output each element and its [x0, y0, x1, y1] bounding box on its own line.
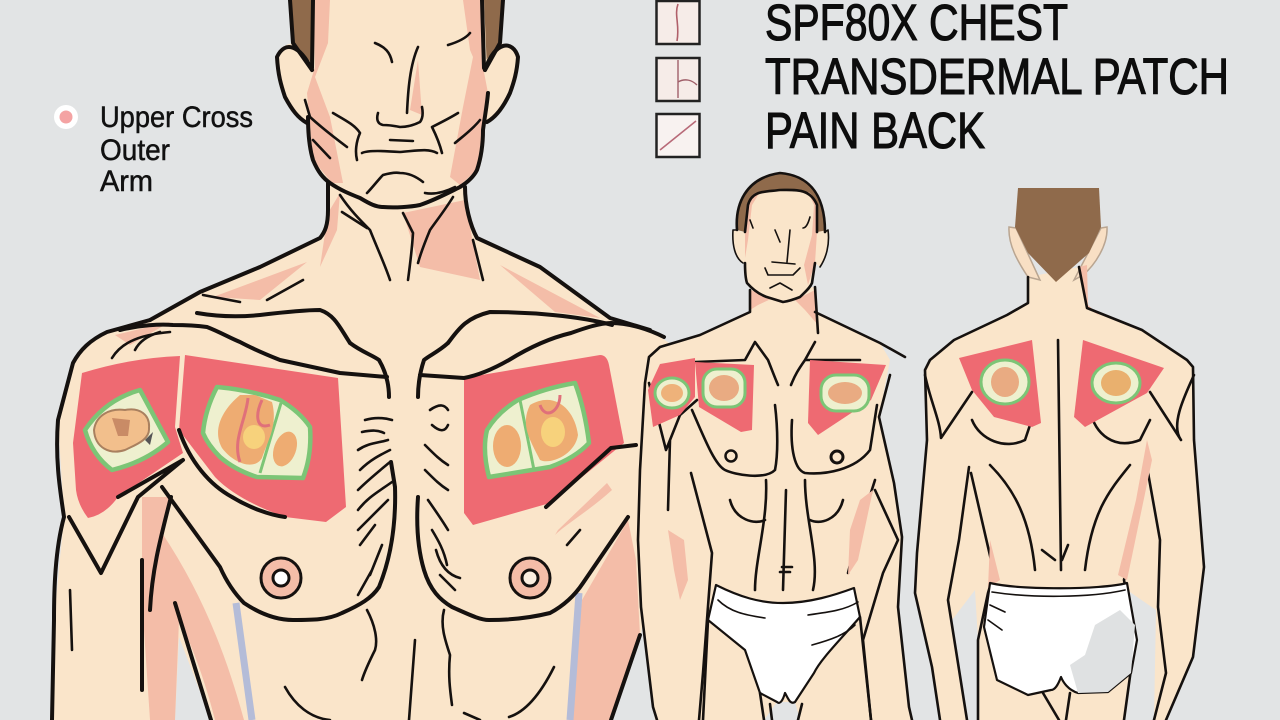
heading: legend labels: [765, 0, 1229, 159]
patch window with tissue: [203, 387, 310, 478]
legend swatches: [656, 1, 700, 157]
large figure torso silhouette: [52, 183, 672, 720]
figure: small back view: [915, 188, 1204, 720]
callout: body region labels: Outer: [100, 134, 170, 167]
callout: marker dot: [54, 105, 78, 129]
large figure head: [150, 0, 650, 330]
figure: large front chest close-up: [52, 0, 672, 720]
swatch: pain back: [656, 114, 700, 157]
pink shading bands: [115, 262, 640, 720]
back view patches: [959, 340, 1164, 427]
front view patches: [648, 358, 886, 435]
swatch: SPF80X chest: [656, 1, 700, 44]
nipples: [261, 558, 550, 598]
front view contour lines: [638, 287, 912, 720]
patch: left pectoral: [179, 355, 346, 522]
front view white brief: [703, 585, 871, 720]
callout: body region labels: [100, 101, 253, 198]
large figure contour lines: [52, 310, 664, 720]
patch window with tissue: [85, 390, 168, 470]
heading: legend labels: PAIN BACK: [765, 102, 985, 159]
back view pink shading: [988, 440, 1152, 588]
front view head: [733, 173, 829, 325]
callout: body region labels: Arm: [100, 165, 153, 198]
front view pink shading: [668, 490, 873, 600]
back view body silhouette: [915, 267, 1204, 720]
callout: body region labels: Upper Cross: [100, 101, 253, 134]
front view body silhouette: [638, 287, 912, 720]
large figure chest hair and detail lines: [70, 280, 580, 720]
patch: left shoulder: [73, 356, 183, 518]
blue vein lines: [236, 593, 579, 720]
figure: small front view: [638, 173, 912, 720]
back view white brief: [984, 583, 1137, 720]
swatch: transdermal patch: [656, 58, 700, 101]
face pink shading: [307, 0, 488, 280]
back view head and hair: [1009, 188, 1107, 316]
front view nipples: [726, 450, 843, 463]
patch window with tissue: [485, 383, 589, 477]
patch: right pectoral: [464, 355, 624, 525]
back view contour lines: [915, 267, 1204, 720]
